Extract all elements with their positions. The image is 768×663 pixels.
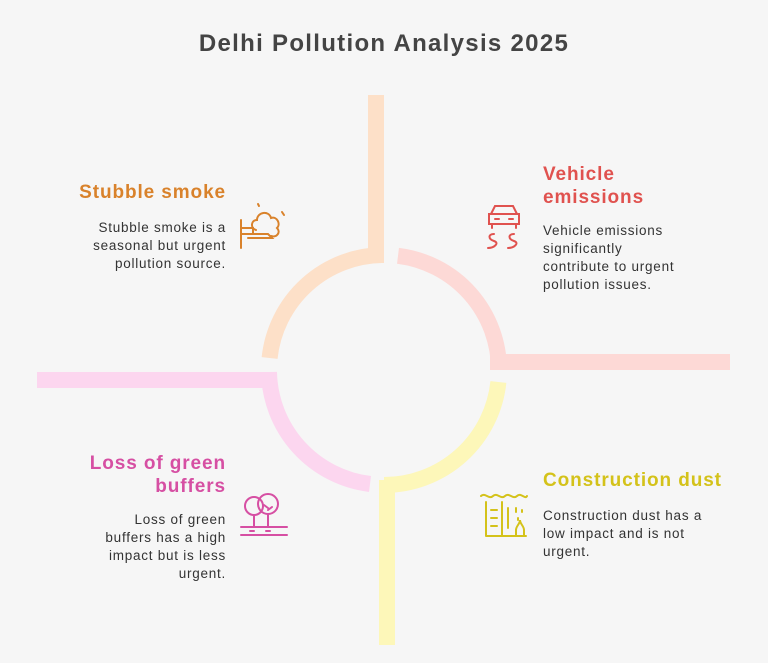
text: construction dust: low impact and is not	[543, 526, 685, 541]
text: loss of green buffers: Loss of green	[134, 512, 226, 527]
text: vehicle emissions: pollution issues.	[543, 277, 652, 292]
text: loss of green buffers	[105, 512, 226, 581]
text: vehicle emissions	[543, 223, 674, 292]
text: construction dust: urgent.	[543, 544, 590, 559]
icon: trees	[240, 493, 288, 536]
icon: car	[487, 205, 520, 249]
heading: loss of green buffers: Loss of green	[90, 453, 226, 474]
text: construction dust: Construction dust has a	[543, 508, 702, 523]
text: construction dust	[543, 508, 702, 559]
icon: construction	[480, 494, 528, 537]
text: loss of green buffers: buffers has a high	[105, 530, 226, 545]
heading: loss of green buffers	[90, 453, 226, 497]
heading: vehicle emissions: Vehicle	[543, 164, 615, 185]
text: vehicle emissions: Vehicle emissions	[543, 223, 663, 238]
icon: smoke	[240, 203, 285, 249]
text: stubble smoke: Stubble smoke is a	[98, 220, 226, 235]
text: stubble smoke	[93, 220, 226, 271]
arc: loss of green buffers	[37, 372, 370, 484]
text: loss of green buffers: urgent.	[179, 566, 226, 581]
arc: vehicle emissions	[398, 256, 730, 370]
text: loss of green buffers: impact but is less	[109, 548, 226, 563]
heading: stubble smoke: Stubble smoke	[79, 182, 226, 203]
text: vehicle emissions: contribute to urgent	[543, 259, 674, 274]
heading: vehicle emissions	[543, 164, 644, 208]
arc: stubble smoke	[270, 95, 384, 358]
title: Delhi Pollution Analysis 2025	[199, 30, 569, 57]
text: stubble smoke: pollution source.	[115, 256, 226, 271]
heading: vehicle emissions: emissions	[543, 187, 644, 208]
heading: construction dust: Construction dust	[543, 470, 722, 491]
heading: loss of green buffers: buffers	[155, 476, 226, 497]
text: vehicle emissions: significantly	[543, 241, 623, 256]
arc: construction dust	[379, 382, 498, 645]
text: stubble smoke: seasonal but urgent	[93, 238, 226, 253]
